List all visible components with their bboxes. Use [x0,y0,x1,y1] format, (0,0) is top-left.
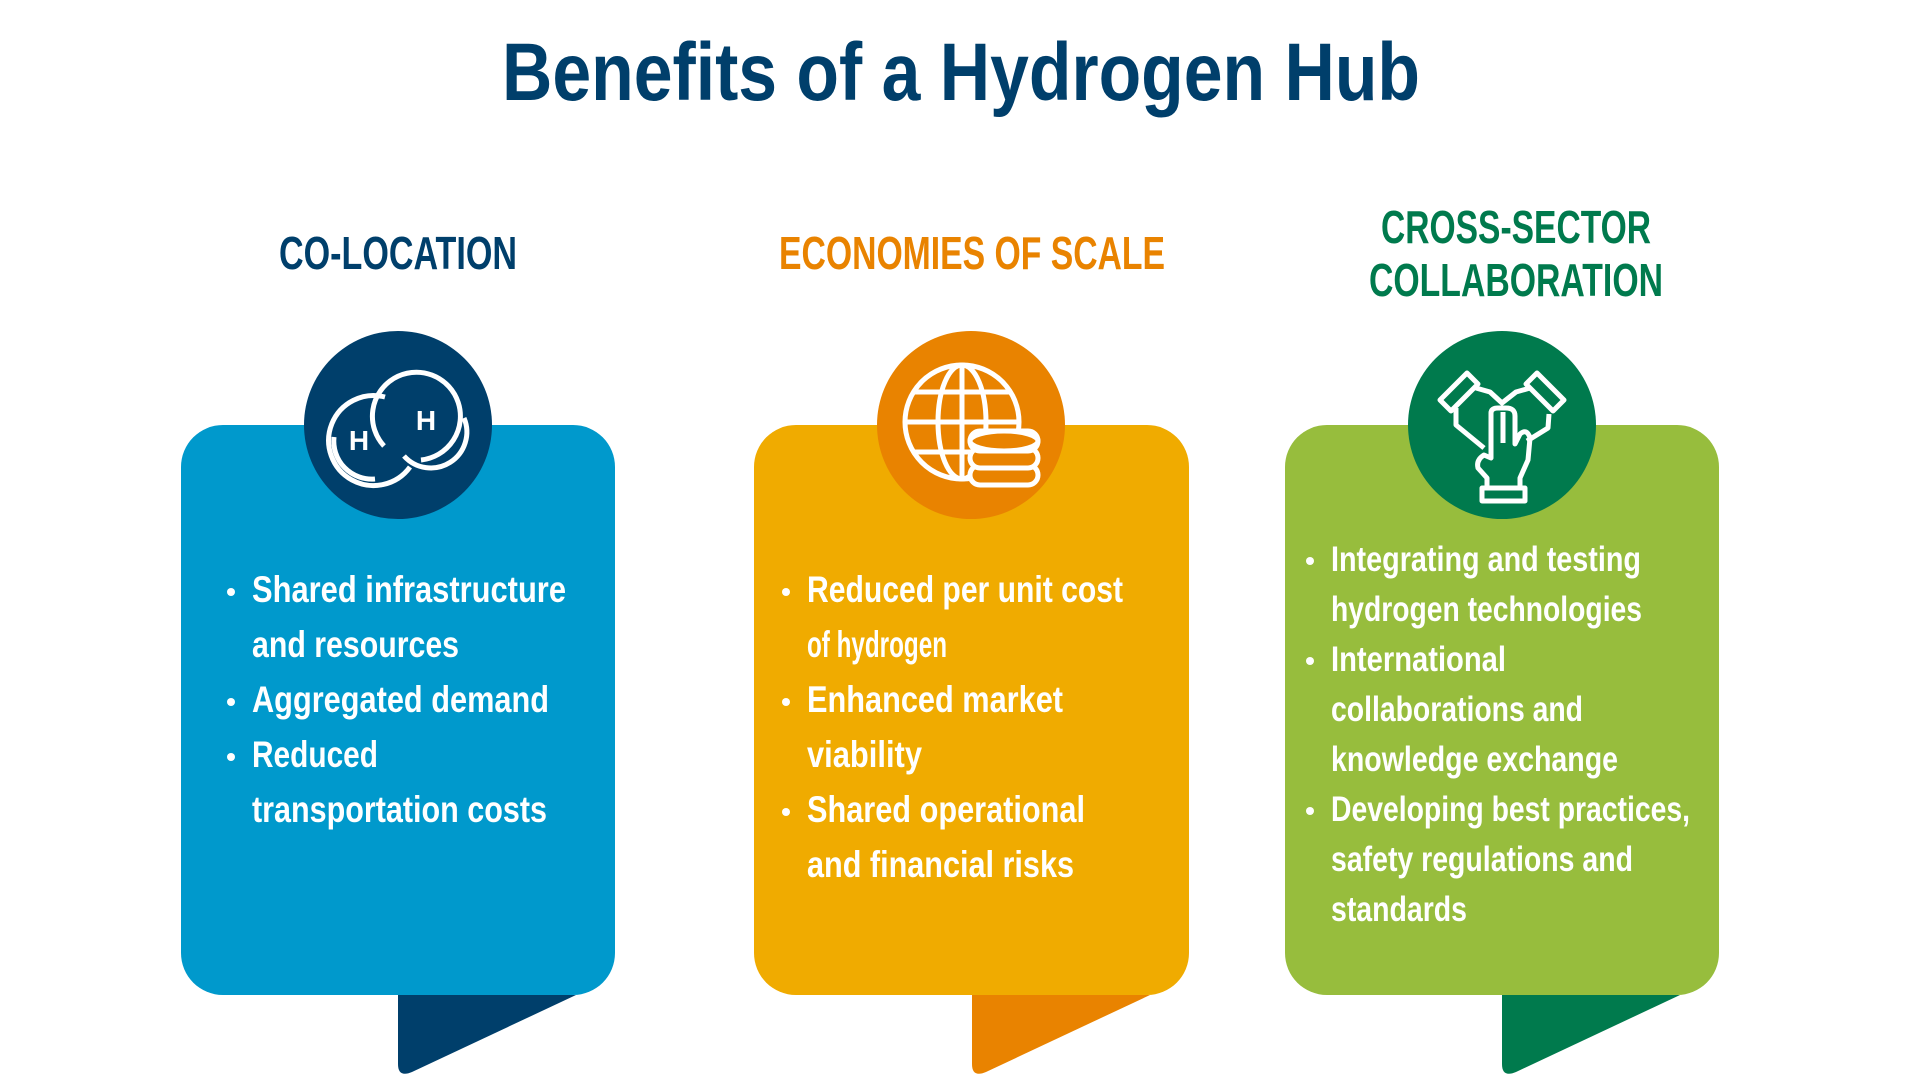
panel: cross-sector collaboration [1285,201,1719,1074]
heading: cross-sector collaboration: CROSS-SECTOR [1381,201,1651,253]
panel: co-location [181,227,615,1074]
card: economies [754,425,1189,995]
heading: cross-sector collaboration: COLLABORATION [1369,254,1663,306]
bullets: economies: Enhanced market [807,679,1063,720]
bullets: economies: viability [807,734,922,775]
bullets: co-location: transportation costs [252,789,547,830]
bullets: cross-sector: collaborations and [1331,690,1583,729]
bullets: cross-sector: Integrating and testing [1331,540,1641,579]
icon: hydrogen molecule: H [349,425,369,456]
heading: co-location: CO-LOCATION [279,227,517,279]
icon: hydrogen molecule: H [416,405,436,436]
icon: globe with coins [877,331,1065,519]
card: cross-sector [1285,425,1719,995]
heading: cross-sector collaboration [1369,201,1663,306]
bullets: co-location: Shared infrastructure [252,569,566,610]
bullets: cross-sector: standards [1331,890,1467,929]
tail: co-location [398,990,576,1074]
tail: economies [972,990,1150,1074]
bullets: cross-sector: International [1331,640,1506,679]
bullets: cross-sector: Developing best practices, [1331,790,1690,829]
bullets: cross-sector: hydrogen technologies [1331,590,1642,629]
bullets: economies: Reduced per unit cost [807,569,1123,610]
bullets: cross-sector [1306,540,1690,929]
panel: economies of scale [754,227,1189,1074]
bullets: economies: and financial risks [807,844,1074,885]
bullets: co-location: Aggregated demand [252,679,549,720]
bullets: economies: of hydrogen [807,624,947,665]
bullets: cross-sector: knowledge exchange [1331,740,1618,779]
title: Benefits of a Hydrogen Hub [502,27,1420,118]
bullets: economies [782,569,1123,885]
bullets: co-location: and resources [252,624,459,665]
bullets: economies: Shared operational [807,789,1085,830]
card: co-location [181,425,615,995]
bullets: cross-sector: safety regulations and [1331,840,1633,879]
tail: cross-sector [1502,990,1680,1074]
bullets: co-location: Reduced [252,734,378,775]
icon: hydrogen molecule [304,331,492,519]
heading: economies of scale: ECONOMIES OF SCALE [779,227,1165,279]
icon: joined hands [1408,331,1596,519]
bullets: co-location [227,569,566,830]
